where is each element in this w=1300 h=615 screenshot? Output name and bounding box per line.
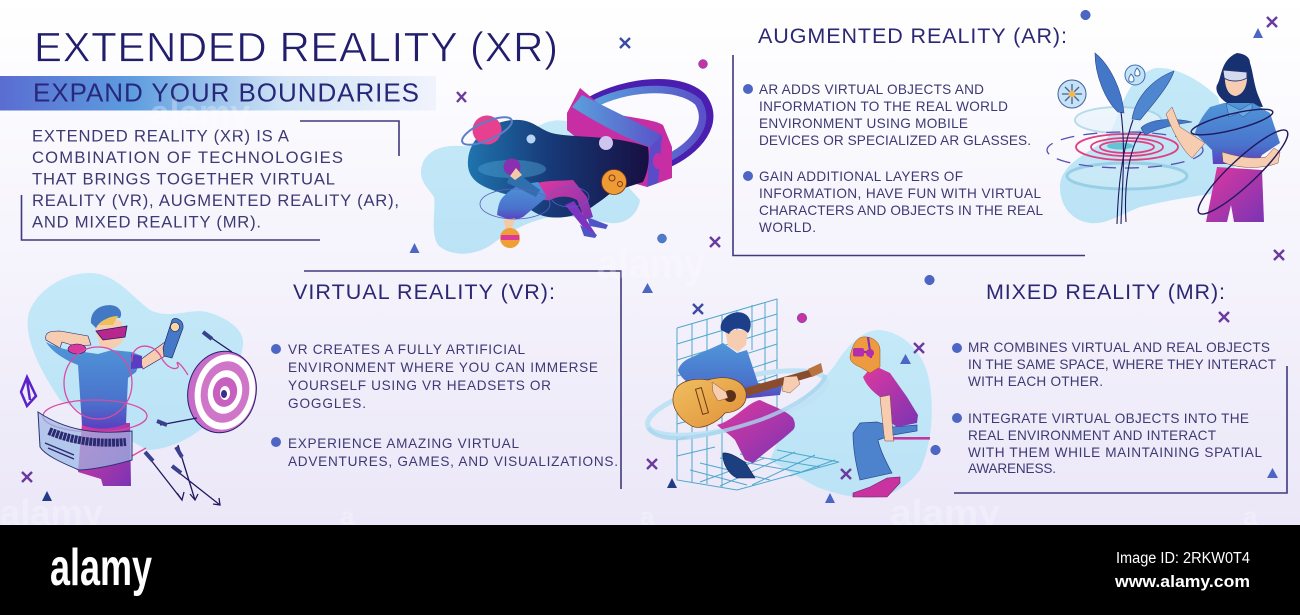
footer url: www.alamy.com bbox=[1114, 572, 1250, 591]
decor: triangles bbox=[42, 28, 1278, 503]
man shoes bbox=[723, 453, 755, 478]
illustration: astronaut floating in VR headset bbox=[421, 84, 708, 254]
heading: VR: VIRTUAL REALITY (VR): bbox=[293, 280, 555, 304]
woman shirt bbox=[1195, 103, 1280, 164]
astronaut figure bbox=[565, 201, 597, 236]
woman VR headset bbox=[853, 337, 874, 358]
AR bullet one: INFORMATION TO THE REAL WORLD bbox=[759, 99, 1008, 114]
AR bullet two: CHARACTERS AND OBJECTS IN THE REAL bbox=[759, 203, 1043, 218]
MR bullet two: INTEGRATE VIRTUAL OBJECTS INTO THE bbox=[968, 411, 1249, 426]
woman pants bbox=[1206, 167, 1264, 222]
AR bullet two bbox=[743, 169, 1043, 235]
watermark ghosts: a bbox=[340, 501, 355, 531]
headset body bbox=[567, 88, 672, 187]
AR bullet one: DEVICES OR SPECIALIZED AR GLASSES. bbox=[759, 133, 1031, 148]
intro text block: EXTENDED REALITY (XR) IS A bbox=[32, 126, 290, 146]
intro text block: AND MIXED REALITY (MR). bbox=[32, 212, 261, 232]
bow icon bbox=[21, 377, 36, 406]
section: virtual reality bbox=[271, 271, 621, 489]
headset strap bbox=[590, 84, 708, 164]
MR bullet two: WITH THEM WHILE MAINTAINING SPATIAL bbox=[968, 445, 1262, 460]
holographic screen bbox=[38, 412, 132, 470]
woman jeans bbox=[853, 422, 917, 480]
watermark ghosts: alamy bbox=[150, 92, 250, 133]
ringed pink planet bbox=[472, 116, 502, 144]
woman face bbox=[1225, 72, 1247, 96]
water drop badge icon bbox=[1125, 65, 1145, 85]
watermark ghosts: alamy bbox=[890, 492, 1000, 533]
VR bullet one bbox=[271, 342, 598, 411]
woman hair bbox=[850, 337, 880, 373]
hologram discs bbox=[1075, 107, 1161, 133]
VR bullet one: GOGGLES. bbox=[288, 396, 366, 411]
man outstretched arm bbox=[140, 342, 172, 369]
bench bar bbox=[893, 437, 930, 440]
section: augmented reality bbox=[733, 24, 1085, 256]
illustration: woman with AR glasses and holographic plant bbox=[1047, 53, 1296, 224]
VR bullet two: EXPERIENCE AMAZING VIRTUAL bbox=[288, 436, 519, 451]
man pants bbox=[717, 400, 795, 463]
decor: x marks bbox=[22, 17, 1284, 482]
guitar bbox=[673, 363, 823, 427]
heading: MR: MIXED REALITY (MR): bbox=[986, 280, 1225, 304]
subtitle banner: EXPAND YOUR BOUNDARIES bbox=[33, 78, 419, 108]
woman top bbox=[863, 365, 918, 427]
MR bullet two bbox=[952, 411, 1262, 476]
VR bullet one: ENVIRONMENT WHERE YOU CAN IMMERSE bbox=[288, 360, 598, 375]
intro text block: THAT BRINGS TOGETHER VIRTUAL bbox=[32, 170, 335, 188]
galaxy bbox=[478, 160, 546, 178]
wire grid wall and floor bbox=[677, 299, 839, 490]
footer bar bbox=[0, 525, 1300, 615]
MR bullet two: AWARENESS. bbox=[968, 461, 1056, 476]
woman arm left bbox=[1166, 107, 1205, 158]
man hands bbox=[712, 376, 800, 401]
plant leaves bbox=[1095, 53, 1124, 113]
orbit lines bbox=[1189, 104, 1275, 140]
footer image id: Image ID: 2RKW0T4 bbox=[1116, 550, 1250, 567]
watermark ghosts bbox=[0, 92, 1258, 533]
VR bullet two: ADVENTURES, GAMES, AND VISUALIZATIONS. bbox=[288, 454, 618, 469]
illustration: man with guitar and woman in headset bbox=[642, 299, 932, 498]
man pants bbox=[78, 423, 131, 486]
MR bullet one: IN THE SAME SPACE, WHERE THEY INTERACT bbox=[968, 357, 1276, 372]
loose arrows bbox=[145, 332, 232, 505]
target bbox=[180, 345, 264, 439]
VR bullet one: YOURSELF USING VR HEADSETS OR bbox=[288, 378, 551, 393]
VR bullet one: VR CREATES A FULLY ARTIFICIAL bbox=[288, 342, 525, 357]
AR bullet two: GAIN ADDITIONAL LAYERS OF bbox=[759, 169, 963, 184]
watermark ghosts: a bbox=[1243, 501, 1258, 531]
heading: AR: AUGMENTED REALITY (AR): bbox=[758, 24, 1067, 48]
decor: magenta and blue dots bbox=[658, 10, 1090, 455]
frame lines: AR bbox=[733, 55, 1085, 256]
footer logo: alamy bbox=[50, 539, 152, 597]
woman arm across belly bbox=[1222, 148, 1280, 167]
man torso bbox=[46, 342, 142, 429]
woman shoes bbox=[853, 477, 900, 497]
pink motion loops bbox=[43, 346, 188, 456]
VR bullet two bbox=[271, 436, 618, 469]
intro text block bbox=[22, 121, 399, 240]
AR bullet two: WORLD. bbox=[759, 220, 816, 235]
AR bullet one: AR ADDS VIRTUAL OBJECTS AND bbox=[759, 82, 984, 97]
sun badge icon bbox=[1058, 80, 1086, 108]
woman collar bbox=[1226, 103, 1252, 117]
MR bullet one: WITH EACH OTHER. bbox=[968, 374, 1103, 389]
watermark ghosts: alamy bbox=[597, 240, 706, 287]
section: mixed reality bbox=[952, 280, 1287, 493]
illustration: man in VR headset with target and arrows bbox=[21, 273, 264, 505]
woman glasses bbox=[1223, 70, 1247, 81]
man shirt bbox=[678, 343, 782, 400]
title: EXTENDED REALITY (XR) bbox=[34, 24, 558, 70]
watermark ghosts: a bbox=[640, 501, 655, 531]
AR bullet one: ENVIRONMENT USING MOBILE bbox=[759, 116, 968, 131]
intro text block: COMBINATION OF TECHNOLOGIES bbox=[32, 148, 343, 167]
frame lines: VR bbox=[304, 271, 621, 489]
portal of space bbox=[468, 120, 649, 218]
MR bullet one: MR COMBINES VIRTUAL AND REAL OBJECTS bbox=[968, 340, 1270, 355]
hand controllers bbox=[68, 318, 183, 358]
man hair and face bbox=[721, 312, 751, 352]
intro text block: REALITY (VR), AUGMENTED REALITY (AR), bbox=[32, 191, 399, 210]
frame lines: MR bbox=[954, 366, 1287, 493]
watermark ghosts: alamy bbox=[0, 492, 103, 533]
man head and helmet bbox=[91, 305, 127, 348]
swoosh ring front bbox=[648, 375, 825, 438]
AR bullet two: INFORMATION, HAVE FUN WITH VIRTUAL bbox=[759, 186, 1041, 201]
woman hair bbox=[1216, 53, 1263, 107]
MR bullet one bbox=[952, 340, 1276, 389]
MR bullet two: REAL ENVIRONMENT AND INTERACT bbox=[968, 428, 1216, 443]
AR bullet one bbox=[743, 82, 1031, 148]
man raised arm bbox=[46, 331, 91, 348]
woman arm bbox=[880, 395, 894, 441]
swoosh ring back bbox=[642, 357, 832, 449]
